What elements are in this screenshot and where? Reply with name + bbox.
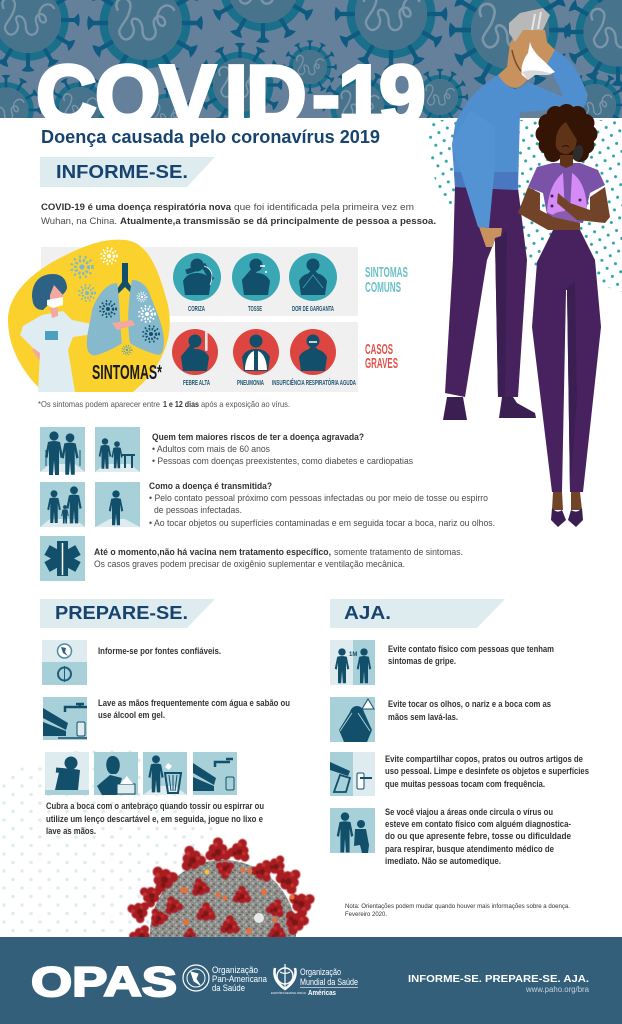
label: casos graves [365, 341, 398, 372]
logo text: PAHO: Pan-Americana [212, 974, 268, 985]
label: tosse: TOSSE [248, 306, 262, 313]
footer slogan: INFORME-SE. PREPARE-SE. AJA. [408, 973, 589, 985]
section band: prepare-se [40, 599, 215, 628]
text: wash hands: use álcool em gel. [98, 710, 165, 721]
icon: chronic conditions [95, 427, 140, 472]
text: avoid contact [388, 644, 554, 667]
icon: one metre distance: 1M [349, 652, 357, 658]
note [345, 903, 570, 918]
footnote: symptoms timing: após a exposição ao vírus. [201, 399, 290, 409]
text: trusted sources: Informe-se por fontes confiáveis. [98, 646, 221, 657]
icon: cover cough with forearm [45, 752, 89, 795]
icon: tissue [94, 752, 138, 795]
text: wash hands [98, 698, 290, 721]
text: cover mouth: lave as mãos. [46, 826, 96, 837]
icon: pneumonia [233, 329, 279, 375]
logo text: WHO: Organização [300, 967, 341, 977]
text: avoid contact: Evite contato físico com pessoas que tenham [388, 644, 554, 655]
text: cover mouth [46, 801, 264, 837]
panel: severe cases [41, 322, 358, 392]
text block: no vaccine [94, 547, 463, 570]
text: avoid contact: sintomas de gripe. [388, 656, 456, 667]
logo text: PAHO: Organização [212, 965, 258, 976]
logo text: PAHO [212, 965, 268, 994]
title: COVID-19 [36, 48, 426, 142]
logo: PAHO emblem [183, 965, 209, 991]
illustration: man sneezing [443, 8, 587, 420]
text: wash hands: Lave as mãos frequentemente com água e sabão ou [98, 698, 290, 709]
intro paragraph: Wuhan, na China. [41, 216, 117, 227]
section band: informe-se [40, 157, 215, 187]
icon: washing hands again [193, 752, 237, 795]
logo text: WHO: Mundial da Saúde [300, 977, 358, 987]
label: pneumonia: PNEUMONIA [237, 380, 264, 387]
footer url: www.paho.org/bra [525, 985, 590, 994]
text block: risk groups [152, 432, 413, 467]
icon: tosse [232, 253, 280, 301]
logo text: WHO: ESCRITÓRIO REGIONAL PARA AS [271, 990, 306, 995]
header band with virus pattern [0, 0, 622, 118]
label: insuficiencia respiratoria aguda: INSUFICIÊNCIA RESPIRATÓRIA AGUDA [272, 378, 356, 387]
text: seek care: imediato. Não se automedique. [385, 856, 501, 867]
icon: medical star [40, 536, 85, 581]
text: avoid sharing [385, 754, 589, 790]
footnote: symptoms timing [38, 399, 290, 409]
illustration: woman with highlighted lungs [518, 104, 610, 527]
intro paragraph: COVID-19 é uma doença respiratória nova [41, 202, 232, 213]
icon: disinfecting door handle [330, 752, 375, 796]
icon: coriza [173, 253, 221, 301]
text block: no vaccine: somente tratamento de sintomas. [334, 547, 463, 558]
icon: febre alta [172, 329, 218, 375]
label: coriza: CORIZA [188, 306, 205, 313]
text: avoid touching: mãos sem lavá-las. [388, 712, 458, 723]
label: dor de garganta: DOR DE GARGANTA [292, 306, 334, 313]
icon: one metre distance [330, 640, 375, 685]
note: Nota: Orientações podem mudar quando houver mais informações sobre a doença. [345, 903, 570, 910]
footer band [0, 937, 622, 1024]
icon: paho and who logos [42, 640, 87, 685]
section band: prepare-se: PREPARE-SE. [55, 602, 188, 623]
icon: elderly couple [40, 427, 85, 475]
text block: risk groups: • Adultos com mais de 60 anos [152, 444, 270, 455]
illustration: coronavirus [126, 836, 316, 937]
text block: transmission: • Ao tocar objetos ou superfícies contaminadas e em seguida tocar a boca, nariz ou olhos. [149, 518, 495, 529]
logo text: WHO: Américas [308, 990, 336, 997]
icon: person coughing [95, 482, 140, 527]
label: sintomas comuns [365, 264, 408, 296]
icon: doctor examining patient [330, 808, 375, 853]
label: sintomas: SINTOMAS* [92, 362, 162, 384]
text block: transmission: de pessoas infectadas. [154, 505, 242, 516]
text: avoid sharing: Evite compartilhar copos, pratos ou outros artigos de [385, 754, 583, 765]
icon: insuficiencia respiratoria [290, 329, 336, 375]
icon: family near sneezing person [40, 482, 85, 527]
logo: WHO emblem [274, 964, 296, 989]
subtitle: Doença causada pelo coronavírus 2019 [41, 127, 380, 147]
text: cover mouth: utilize um lenço descartável e, em seguida, jogue no lixo e [46, 814, 263, 825]
label: sintomas comuns: COMUNS [365, 279, 401, 296]
intro paragraph: que foi identificada pela primeira vez em [234, 202, 414, 213]
label: casos graves: GRAVES [365, 355, 398, 372]
label: febre alta: FEBRE ALTA [183, 380, 210, 387]
logo text: WHO [271, 967, 358, 997]
logo text: PAHO: da Saúde [212, 983, 245, 994]
note: Fevereiro 2020. [345, 911, 387, 918]
text block: transmission [149, 481, 495, 529]
intro paragraph: Atualmente,a transmissão se dá principalmente de pessoa a pessoa. [120, 216, 436, 227]
section band: informe-se: INFORME-SE. [56, 161, 188, 182]
text: cover mouth: Cubra a boca com o antebraço quando tossir ou espirrar ou [46, 801, 264, 812]
text: seek care [385, 807, 571, 867]
text: avoid touching: Evite tocar os olhos, o nariz e a boca com as [388, 699, 551, 710]
section band: aja [330, 599, 505, 628]
pale dot field [0, 745, 215, 937]
footnote: symptoms timing: 1 e 12 dias [163, 399, 199, 409]
text block: transmission: • Pelo contato pessoal próximo com pessoas infectadas ou por meio de tosse ou espirro [149, 493, 488, 504]
teal dot field [426, 120, 622, 292]
text: seek care: esteve em contato físico com alguém diagnostica- [385, 819, 571, 830]
icon: washing hands [43, 697, 87, 740]
text block: no vaccine: Os casos graves podem precisar de oxigênio suplementar e ventilação mecânica. [94, 559, 405, 570]
intro paragraph [41, 202, 436, 227]
icon: do not touch face [330, 697, 375, 742]
text: seek care: para respirar, busque atendimento médico de [385, 844, 554, 855]
text: seek care: do ou que apresente febre, tosse ou dificuldade [385, 831, 571, 842]
panel: common symptoms [41, 247, 358, 316]
text: avoid sharing: que muitas pessoas tocam com frequência. [385, 779, 545, 790]
label: casos graves: CASOS [365, 341, 393, 358]
illustration: doctor and lungs on yellow shape [8, 240, 170, 392]
label: sintomas comuns: SINTOMAS [365, 264, 408, 281]
text: seek care: Se você viajou a áreas onde circula o vírus ou [385, 807, 553, 818]
text: avoid touching [388, 699, 551, 723]
section band: aja: AJA. [344, 602, 391, 623]
text block: risk groups: • Pessoas com doenças preexistentes, como diabetes e cardiopatias [152, 456, 413, 467]
text block: risk groups: Quem tem maiores riscos de ter a doença agravada? [152, 432, 364, 443]
icon: trash bin [143, 752, 187, 795]
icon: dor de garganta [289, 253, 337, 301]
text block: no vaccine: Até o momento,não há vacina nem tratamento específico, [94, 547, 331, 558]
footnote: symptoms timing: *Os sintomas podem aparecer entre [38, 399, 160, 409]
logo: OPAS wordmark: OPAS [31, 958, 177, 1005]
text block: transmission: Como a doença é transmitida? [149, 481, 272, 492]
